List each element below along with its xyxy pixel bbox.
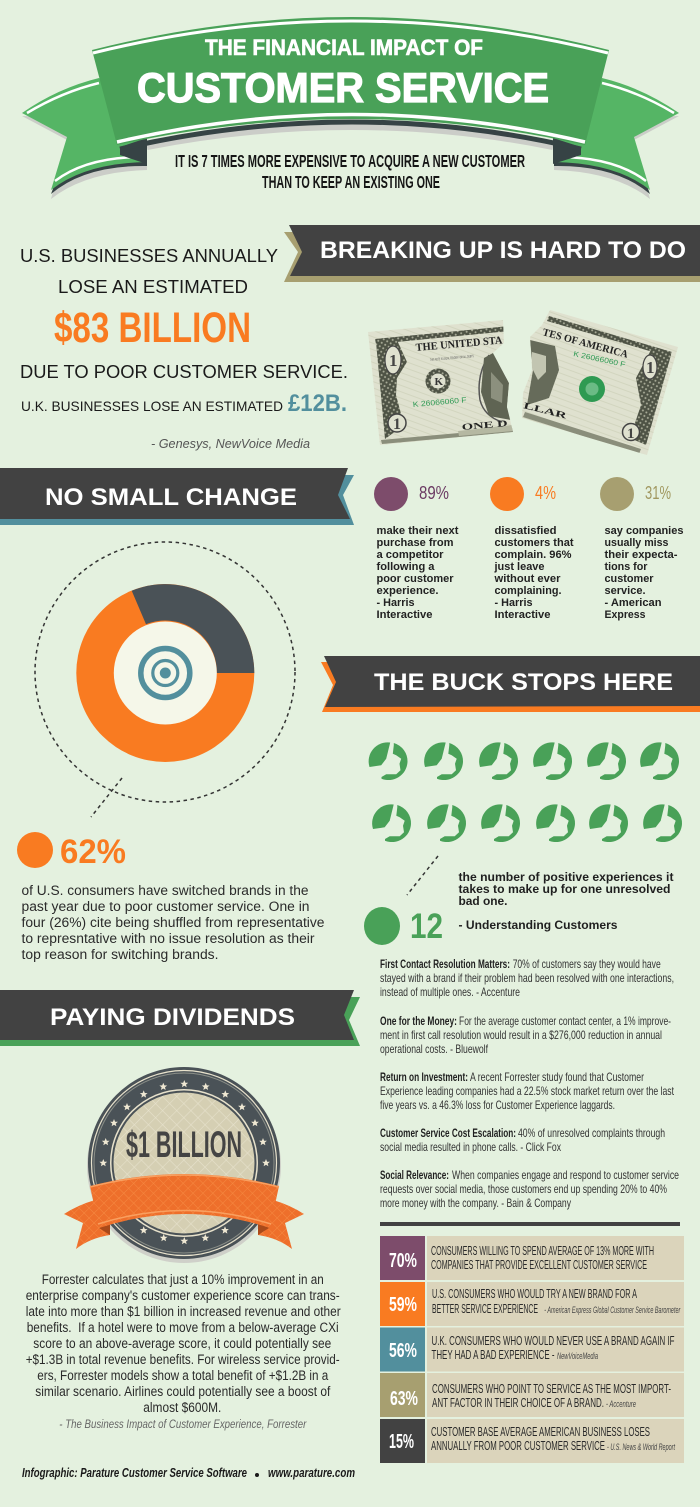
text block: facts list: One for the Money: <box>380 1014 457 1028</box>
stat: 12: 12 <box>410 907 443 946</box>
bill: right half: TES OF AMERICA <box>541 327 629 361</box>
text block: forrester: late into more than $1 billion in increased revenue and other <box>26 1304 341 1319</box>
subtitle <box>175 151 525 192</box>
text block: $83 billion: U.S. BUSINESSES ANNUALLY <box>20 245 278 266</box>
section heading: breaking up: BREAKING UP IS HARD TO DO <box>320 237 686 264</box>
text block: facts list: operational costs. - Bluewolf <box>380 1042 488 1056</box>
stat: 4%: - Harris <box>494 597 532 609</box>
bill: left half <box>368 320 513 445</box>
bill: right half: 1 <box>627 426 634 442</box>
text block: forrester: Forrester calculates that just a 10% improvement in an <box>42 1272 324 1287</box>
stat: 12: takes to make up for one unresolved <box>458 882 670 896</box>
text block: facts list <box>380 957 679 1210</box>
text block: forrester: +$1.3B in total revenue benefits. For wireless service provid- <box>26 1352 340 1367</box>
stat: 89%: 89% <box>419 483 449 503</box>
text block: facts list: First Contact Resolution Matters: <box>380 957 510 971</box>
stat: 62% <box>17 832 324 962</box>
stat: 89%: a competitor <box>376 549 444 561</box>
stat: 12: - Understanding Customers <box>458 918 618 932</box>
row: 63%: - Accenture <box>606 1399 636 1409</box>
stat: 4%: just leave <box>494 561 544 573</box>
stat: 62%: 62% <box>60 833 126 871</box>
stat: 4%: 4% <box>535 483 556 503</box>
bill: left half: K <box>434 376 444 388</box>
bill: left half: 1 <box>389 351 398 370</box>
stat: 62%: to represntative with no issue resolution as their <box>22 931 315 946</box>
section heading: the buck stops here <box>321 656 700 712</box>
row: 63% <box>380 1373 684 1417</box>
row: 15% <box>380 1419 684 1463</box>
row: 56%: 56% <box>389 1340 417 1362</box>
text block: forrester: score to an above-average score, it could potentially see <box>33 1336 331 1351</box>
stat: 31%: their expecta- <box>604 549 678 561</box>
stat: 4%: Interactive <box>494 609 550 621</box>
bill: left half: THE UNITED STA <box>415 334 503 354</box>
stat: 89%: - Harris <box>376 597 414 609</box>
section heading: no small change <box>0 468 354 525</box>
row: 15%: 15% <box>389 1431 414 1453</box>
stat: 89%: poor customer <box>376 573 454 585</box>
stat: 62%: four (26%) cite being shuffled from representative <box>22 915 324 930</box>
orange ribbon <box>64 1174 304 1249</box>
stat: 31%: customer <box>604 573 654 585</box>
stat: 12 <box>364 870 674 946</box>
stat: 4%: customers that <box>494 537 574 549</box>
image: torn dollar bill <box>368 310 678 455</box>
text block: forrester: benefits. If a hotel were to move from a below-average CXi <box>27 1320 339 1335</box>
bill: right half: 1 <box>646 358 654 377</box>
footer credit: Infographic: Parature Customer Service Software <box>22 1465 247 1480</box>
stat: 4% <box>490 477 574 621</box>
stat: 31%: service. <box>604 585 646 597</box>
section heading: paying dividends <box>0 990 360 1046</box>
section heading: breaking up <box>284 225 700 282</box>
stat: 31% <box>600 477 684 621</box>
bill: right half: K 26066060 F <box>573 349 627 369</box>
stat: 4%: complain. 96% <box>494 549 572 561</box>
stat: 31%: tions for <box>604 561 648 573</box>
title banner: THE FINANCIAL IMPACT OF <box>205 35 483 60</box>
stat: 12: bad one. <box>458 894 508 908</box>
bill: left half: K 26066060 F <box>412 395 467 409</box>
bill: left half: THIS NOTE IS LEGAL TENDER FOR ALL DEBTS <box>430 354 474 362</box>
bill: right half <box>522 310 678 455</box>
section heading: paying dividends: PAYING DIVIDENDS <box>50 1004 295 1031</box>
text block: $83 billion: LOSE AN ESTIMATED <box>58 276 248 297</box>
text block: $83 billion: DUE TO POOR CUSTOMER SERVICE. <box>20 361 348 382</box>
stat: 89%: make their next <box>376 525 459 537</box>
row: 59% <box>380 1282 684 1326</box>
text block: facts list: Social Relevance: <box>380 1168 449 1182</box>
donut chart: 62% <box>35 542 295 817</box>
title banner <box>22 17 679 199</box>
row: 70% <box>380 1236 684 1280</box>
bill: left half: ONE D <box>461 418 509 432</box>
text block: facts list: social media resulted in phone calls. - Click Fox <box>380 1140 561 1154</box>
row: 63%: 63% <box>390 1388 418 1410</box>
stat: 12: the number of positive experiences it <box>458 870 674 884</box>
stat: 62%: of U.S. consumers have switched brands in the <box>22 883 308 898</box>
text block: facts list: Return on Investment: <box>380 1070 468 1084</box>
text block: forrester: - The Business Impact of Customer Experience, Forrester <box>59 1419 307 1431</box>
text block: $83 billion: - Genesys, NewVoice Media <box>151 437 310 451</box>
text block: forrester <box>26 1272 341 1431</box>
title banner: CUSTOMER SERVICE <box>137 64 549 111</box>
banner tail: left <box>22 78 147 199</box>
bill: left half: 1 <box>393 416 401 433</box>
stat: 31%: 31% <box>645 483 671 503</box>
text block: facts list: instead of multiple ones. - Accenture <box>380 985 520 999</box>
stat: 89%: experience. <box>376 585 438 597</box>
stat: 89%: purchase from <box>376 537 454 549</box>
row: 59%: BETTER SERVICE EXPERIENCE <box>432 1302 538 1316</box>
row: 56%: NewVoiceMedia <box>557 1351 598 1361</box>
subtitle: THAN TO KEEP AN EXISTING ONE <box>262 172 440 192</box>
row: 56%: THEY HAD A BAD EXPERIENCE - <box>432 1348 554 1362</box>
text block: facts list: more money with the company. - Bain & Company <box>380 1196 571 1210</box>
text block: forrester: similar scenario. Airlines could potentially see a boost of <box>35 1384 331 1399</box>
row: 63%: ANT FACTOR IN THEIR CHOICE OF A BRAND. <box>432 1396 604 1410</box>
stat: 31%: usually miss <box>604 537 668 549</box>
stat: 89%: Interactive <box>376 609 432 621</box>
stat: 62%: top reason for switching brands. <box>22 947 218 962</box>
row: 56% <box>380 1328 684 1372</box>
stat: 89% <box>374 477 459 621</box>
icons: twelve thumbs up <box>369 742 682 895</box>
text block: $83 billion: $83 BILLION <box>54 304 251 352</box>
stat: 31%: - American <box>604 597 662 609</box>
footer credit: www.parature.com <box>268 1465 355 1480</box>
text block: $83 billion: U.K. BUSINESSES LOSE AN ESTIMATED <box>21 398 283 414</box>
text block: forrester: ers, Forrester models show a total benefit of +$1.2B in a <box>37 1368 329 1383</box>
text block: $83 billion <box>20 245 348 451</box>
text block: forrester: enterprise company's customer experience score can trans- <box>26 1288 340 1303</box>
bill: right half: LLAR <box>523 400 568 421</box>
text block: forrester: almost $600M. <box>143 1400 221 1415</box>
stat: 31%: Express <box>604 609 646 621</box>
banner tail: right <box>554 78 679 199</box>
text block: facts list: Customer Service Cost Escalation: <box>380 1126 516 1140</box>
row: 70%: 70% <box>389 1250 417 1272</box>
stat: 89%: following a <box>376 561 435 573</box>
text block: $83 billion: £12B. <box>288 390 347 417</box>
badge: $1 billion: $1 BILLION <box>126 1124 242 1165</box>
section heading: the buck stops here: THE BUCK STOPS HERE <box>374 669 673 696</box>
section heading: no small change: NO SMALL CHANGE <box>45 484 297 511</box>
stat: 62%: past year due to poor customer service. One in <box>22 899 310 914</box>
row: 59%: 59% <box>389 1294 417 1316</box>
stat: 4%: without ever <box>493 573 561 585</box>
badge: $1 billion <box>64 1067 304 1263</box>
stat: 4%: dissatisfied <box>494 525 556 537</box>
table: statistics rows <box>380 1236 684 1463</box>
stat: 31%: say companies <box>604 525 684 537</box>
stat: 4%: complaining. <box>494 585 562 597</box>
stars <box>99 1080 270 1244</box>
